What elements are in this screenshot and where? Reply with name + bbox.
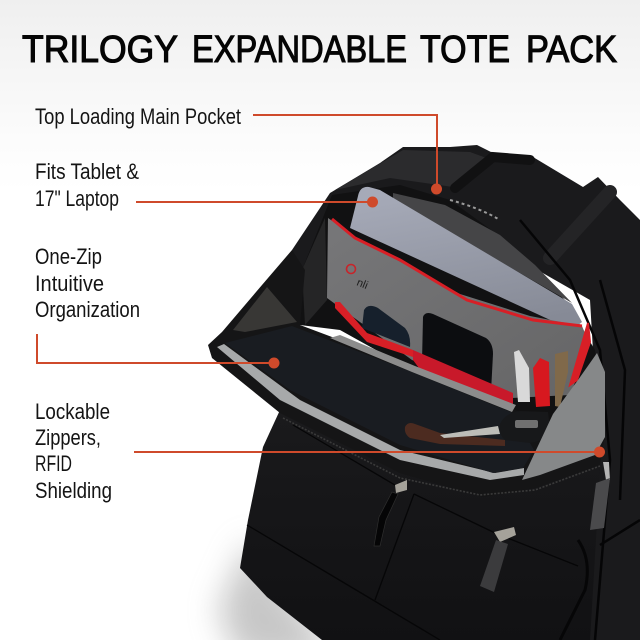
red pocket zip left bbox=[335, 302, 413, 357]
title: TOTE bbox=[420, 29, 510, 71]
title bbox=[22, 29, 617, 71]
label: fits tablet and laptop: Fits Tablet & bbox=[35, 159, 139, 184]
label: lockable zippers, rfid shielding: Shielding bbox=[35, 478, 112, 503]
flap light lining strip bbox=[217, 344, 524, 480]
label: lockable zippers, rfid shielding bbox=[35, 399, 112, 503]
grey corner lining bbox=[522, 353, 605, 480]
front zipper pull left bbox=[374, 480, 407, 546]
title: PACK bbox=[526, 29, 617, 71]
right zipper pull bbox=[590, 462, 610, 530]
white pen bbox=[514, 350, 530, 402]
main zipper bbox=[450, 200, 500, 220]
backpack photo illustration bbox=[208, 145, 640, 640]
floor shadow bbox=[218, 540, 340, 640]
flap dark interior bbox=[225, 326, 534, 473]
handle straps bbox=[455, 157, 610, 258]
zipper pull bbox=[417, 373, 423, 379]
zipper seam on flap bbox=[283, 418, 600, 495]
front zipper pull right bbox=[480, 527, 516, 592]
flap side fabric bbox=[233, 287, 297, 332]
inner back lining bbox=[393, 193, 572, 303]
top fabric highlight bbox=[335, 150, 492, 190]
inner main compartment bbox=[300, 185, 605, 440]
pens bbox=[514, 350, 568, 407]
strip between pocket and flap bbox=[330, 335, 516, 412]
right side strap seams bbox=[520, 220, 640, 640]
key blade bbox=[440, 426, 500, 438]
red side trim bbox=[570, 323, 590, 385]
lower bag body bbox=[240, 410, 640, 640]
black phone bbox=[422, 313, 493, 392]
label: lockable zippers, rfid shielding: Zippers, bbox=[35, 425, 101, 450]
title: EXPANDABLE bbox=[192, 29, 407, 71]
brand logo bbox=[346, 264, 370, 292]
red zipper trim upper bbox=[332, 219, 582, 326]
red pocket zip right bbox=[413, 350, 513, 412]
leather key strap bbox=[405, 423, 505, 446]
tan pen bbox=[555, 351, 568, 407]
label: fits tablet and laptop bbox=[35, 159, 139, 211]
label: one-zip intuitive organization: Organization bbox=[35, 297, 140, 322]
grey organizer panel bbox=[327, 218, 590, 398]
key fob bbox=[500, 411, 550, 443]
callout: laptop bbox=[136, 196, 378, 208]
small dark device bbox=[362, 306, 410, 347]
brand logo: nli bbox=[355, 277, 370, 292]
laptop bbox=[350, 187, 582, 330]
label: one-zip intuitive organization: Intuitive bbox=[35, 271, 104, 296]
callout: organization bbox=[37, 334, 280, 368]
label: lockable zippers, rfid shielding: Lockable bbox=[35, 399, 110, 424]
label: one-zip intuitive organization bbox=[35, 244, 140, 322]
label: fits tablet and laptop: 17" Laptop bbox=[35, 186, 119, 211]
label: top loading main pocket: Top Loading Main Pocket bbox=[35, 104, 241, 129]
red pen bbox=[533, 358, 550, 407]
label: one-zip intuitive organization: One-Zip bbox=[35, 244, 102, 269]
label: lockable zippers, rfid shielding: RFID bbox=[35, 451, 72, 476]
title: TRILOGY bbox=[22, 29, 178, 71]
upper bag body bbox=[292, 145, 640, 640]
open flap outer bbox=[208, 250, 604, 497]
lower body seam and pockets bbox=[247, 425, 587, 640]
callout: zippers bbox=[134, 446, 605, 458]
key fob buttons bbox=[515, 420, 538, 428]
callout: top pocket bbox=[253, 115, 442, 194]
side inner panel bbox=[302, 218, 327, 325]
